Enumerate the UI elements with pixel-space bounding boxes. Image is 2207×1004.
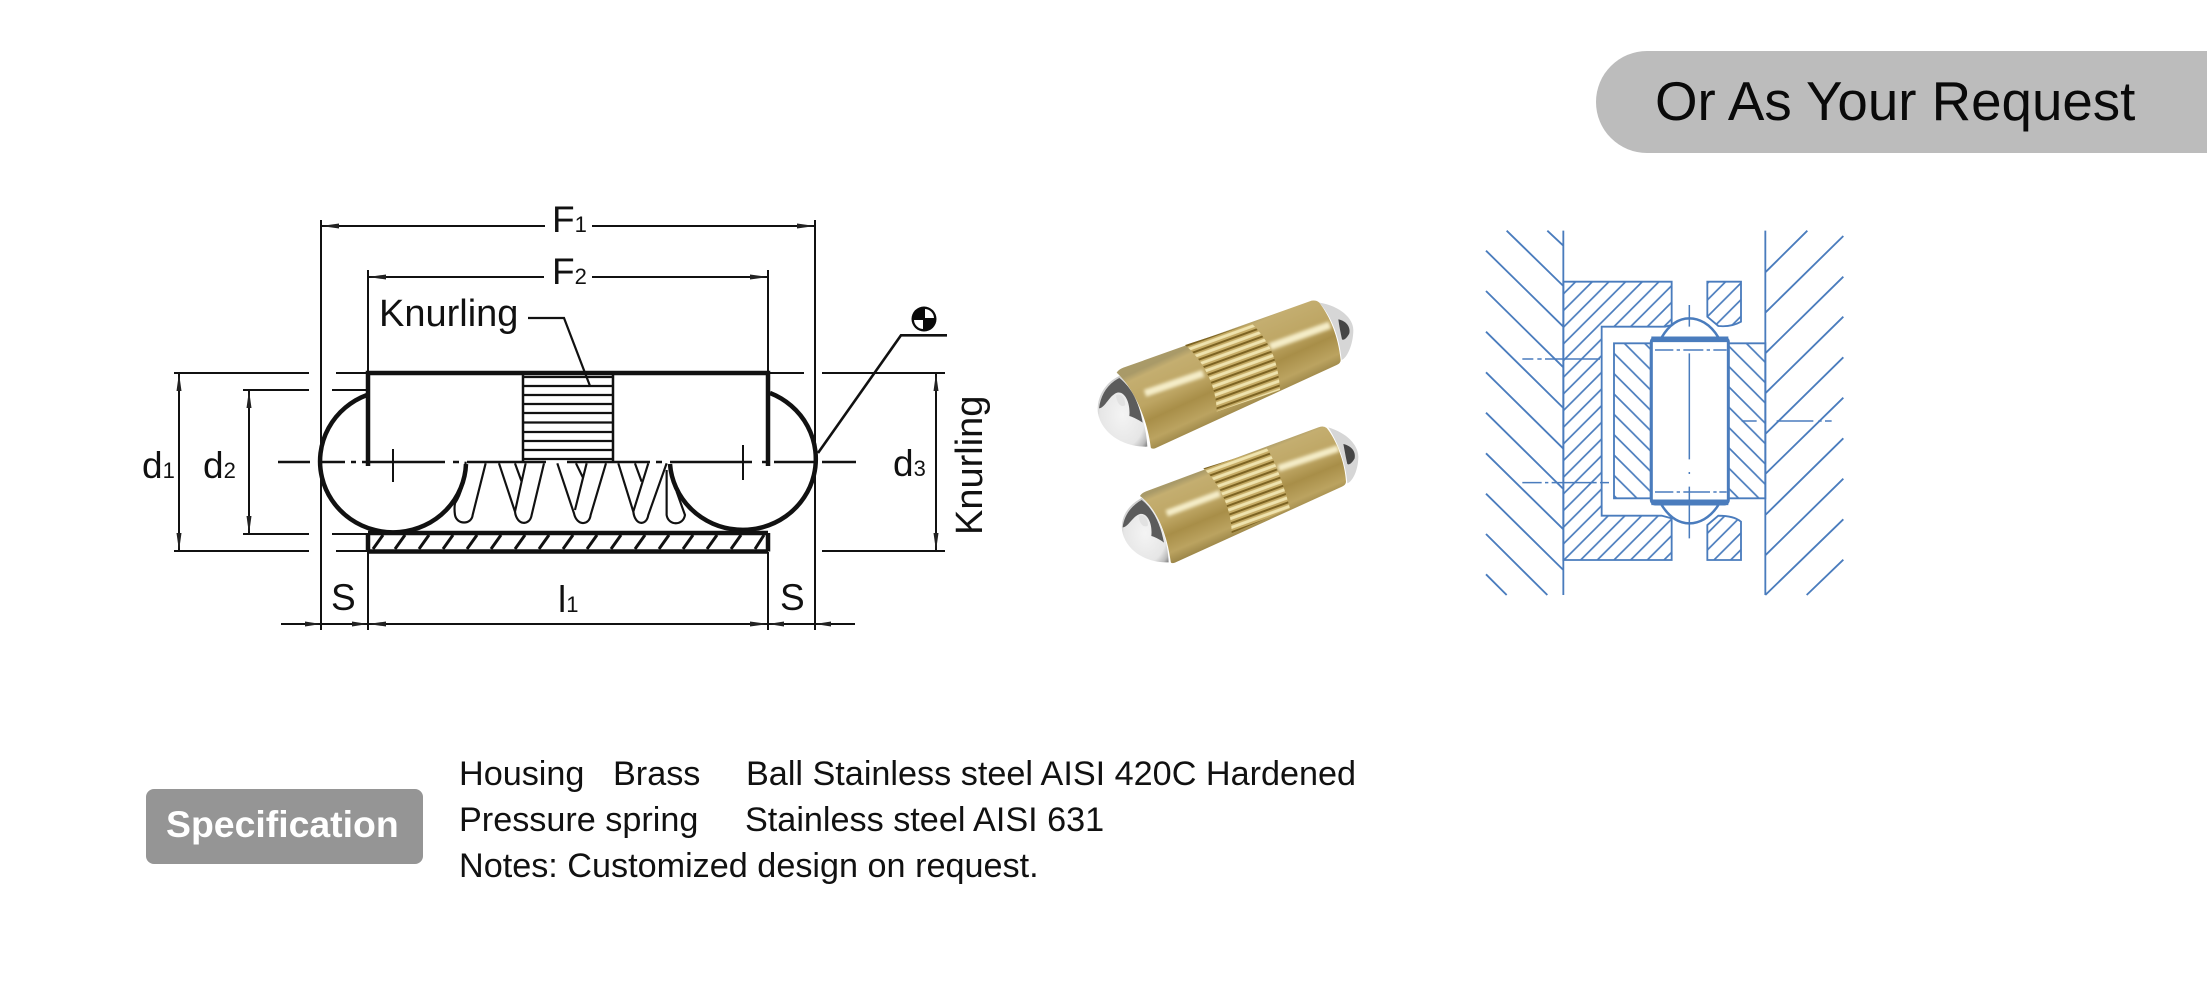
dimension: d1	[142, 373, 368, 551]
balls	[320, 393, 816, 532]
dimension: S and l1	[281, 577, 855, 626]
label: Knurling vertical: Knurling	[949, 396, 991, 535]
label: Knurling leader	[379, 293, 590, 386]
text block: specification details	[459, 755, 1356, 885]
dimension: d2	[203, 390, 366, 534]
dimension: S and l1: S	[780, 577, 805, 618]
plunger ball caps	[1662, 318, 1718, 523]
icon: centre of gravity symbol	[818, 306, 947, 453]
plunger body	[1651, 338, 1728, 504]
text block: specification details: Pressure spring	[459, 801, 698, 839]
spring coils	[454, 462, 685, 523]
centre line	[278, 461, 856, 463]
label: Specification	[146, 789, 423, 864]
text block: specification details: Stainless steel AISI 631	[745, 801, 1104, 839]
dimension: d2: d2	[203, 445, 236, 486]
installation drawing: blue section view	[1486, 231, 1843, 595]
inner sleeve	[1614, 343, 1765, 498]
text block: specification details: Ball Stainless steel AISI 420C Hardened	[746, 755, 1356, 793]
right mounting plate hatch	[1765, 231, 1843, 595]
knurled section	[523, 373, 613, 461]
text block: specification details: Brass	[613, 755, 700, 793]
dimension: S and l1: S	[331, 577, 356, 618]
callout: Or As Your Request	[1596, 51, 2207, 153]
callout: Or As Your Request: Or As Your Request	[1655, 70, 2135, 132]
dimension: d3	[770, 373, 945, 551]
housing body	[368, 373, 768, 466]
text block: specification details: Notes: Customized design on request.	[459, 847, 1039, 885]
plunger 2	[1122, 426, 1358, 563]
dimension: d3: d3	[893, 443, 926, 484]
dimension: F2: F2	[552, 251, 587, 292]
label: Knurling leader: Knurling	[379, 293, 518, 335]
text block: specification details: Housing	[459, 755, 584, 793]
outer housing	[1563, 282, 1741, 560]
bore and centre lines	[1522, 305, 1832, 538]
dimension: d1: d1	[142, 445, 175, 486]
dimension: S and l1: l1	[558, 579, 578, 620]
technical drawing: dimensioned plunger section	[142, 199, 991, 630]
label: Specification: Specification	[166, 803, 399, 845]
product photo: two brass plungers	[1098, 301, 1358, 563]
plunger 1	[1098, 301, 1353, 449]
bottom hatched wall	[368, 533, 768, 552]
dimension: F1	[321, 199, 815, 630]
dimension: F1: F1	[552, 199, 587, 240]
left mounting plate hatch	[1486, 231, 1563, 595]
dimension: F2	[368, 251, 768, 630]
